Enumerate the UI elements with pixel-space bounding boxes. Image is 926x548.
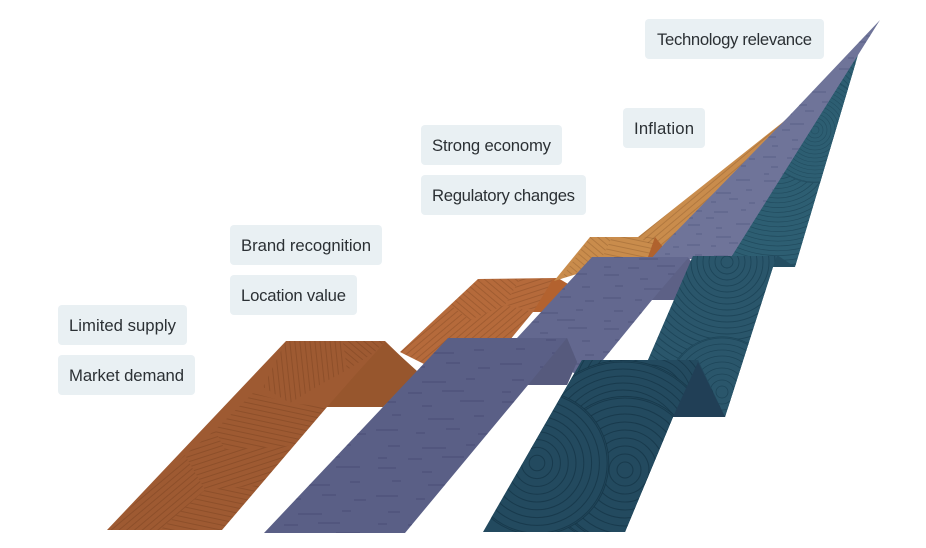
label: Strong economy	[421, 125, 562, 165]
fold: orange segment	[648, 237, 663, 258]
label: Inflation: Inflation	[634, 119, 694, 138]
panel: blue path, lower segment	[264, 338, 577, 533]
fold: brown first segment	[327, 342, 417, 407]
label: Regulatory changes	[421, 175, 586, 215]
fold: blue lower segment	[528, 338, 577, 385]
label: Location value	[230, 275, 357, 315]
panel: brown path, second segment	[400, 278, 568, 372]
label: Technology relevance: Technology relevance	[657, 30, 812, 49]
label: Market demand: Market demand	[69, 366, 184, 385]
label: Limited supply: Limited supply	[69, 316, 177, 335]
label: Market demand	[58, 355, 195, 395]
fold: brown second segment	[533, 278, 568, 312]
label: Brand recognition	[230, 225, 382, 265]
fold: blue middle segment	[652, 258, 693, 300]
panel: teal path, top segment	[732, 55, 858, 267]
label: Inflation	[623, 108, 705, 148]
label: Strong economy: Strong economy	[432, 136, 552, 155]
label: Location value: Location value	[241, 286, 346, 305]
panel: orange path, upper segment	[554, 114, 792, 281]
label: Regulatory changes: Regulatory changes	[432, 186, 575, 205]
panel: teal path, middle segment	[648, 256, 776, 417]
label: Brand recognition: Brand recognition	[241, 236, 371, 255]
fold: teal top segment	[767, 255, 795, 267]
label: Limited supply	[58, 305, 187, 345]
panel: blue path, top segment	[650, 20, 880, 260]
panel: blue path, middle segment	[517, 257, 693, 375]
label: Technology relevance	[645, 19, 824, 59]
panel: teal path, lower segment	[483, 360, 725, 532]
fold: teal lower segment	[673, 362, 725, 417]
panel: brown path, first segment	[107, 341, 417, 530]
